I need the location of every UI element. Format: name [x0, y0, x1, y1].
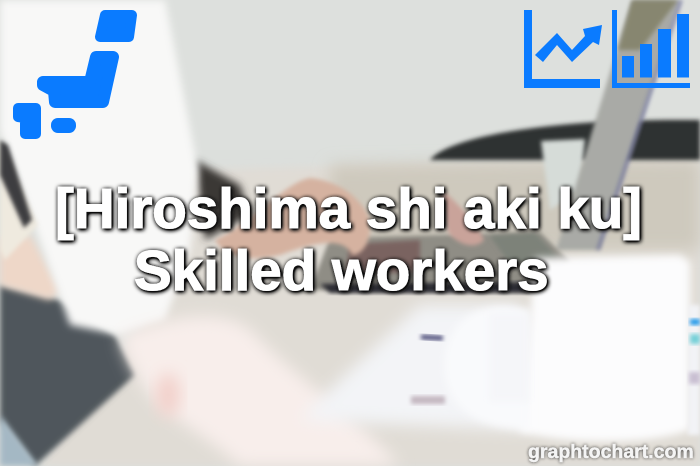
hands on keyboard — [215, 178, 370, 258]
table surface — [40, 158, 700, 466]
icon: line chart — [524, 10, 602, 88]
title line 2: Skilled workers — [134, 239, 549, 302]
laptop screen — [556, 0, 680, 250]
Honshu — [43, 57, 113, 102]
Kyushu — [18, 108, 36, 134]
watermark: graphtochart.com — [528, 441, 694, 463]
white mug — [520, 255, 690, 442]
glass — [541, 139, 585, 210]
dark object behind hand — [195, 160, 250, 240]
Hokkaido — [100, 15, 132, 37]
paper — [300, 305, 530, 430]
laptop base and keyboard — [310, 232, 570, 292]
title line 1: [Hiroshima shi aki ku] — [55, 177, 642, 240]
trend arrow — [535, 25, 602, 62]
Shikoku — [51, 118, 76, 133]
icon: Japan map logo — [18, 15, 132, 134]
icon: bar chart — [612, 10, 690, 88]
title — [55, 177, 642, 302]
dark chair back — [430, 120, 700, 160]
white sleeve — [0, 0, 198, 335]
blurred foreground hand — [120, 317, 400, 466]
dark trousers — [0, 285, 135, 466]
left arm skin — [0, 235, 60, 300]
right-edge paper details — [688, 305, 700, 435]
